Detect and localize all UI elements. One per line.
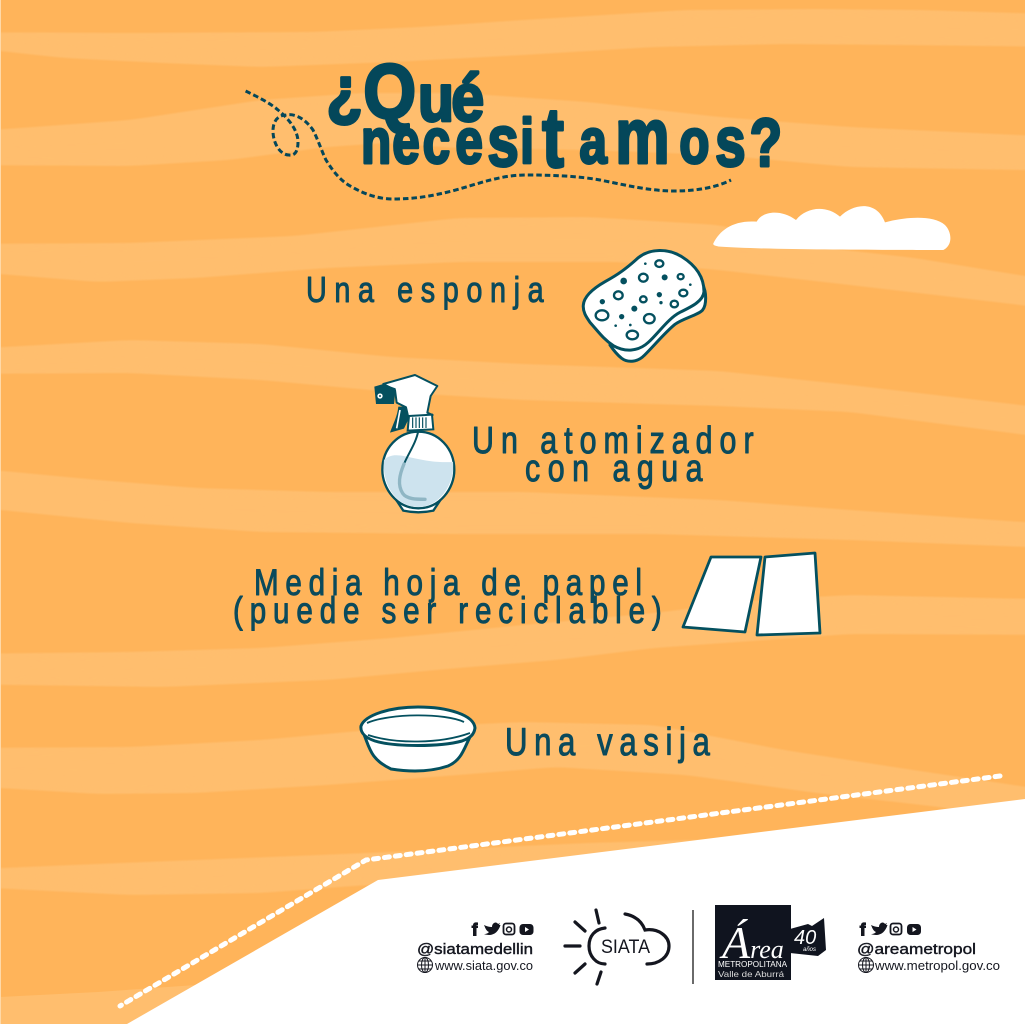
text: Una vasija: Una vasija: [505, 721, 710, 764]
text: Media hoja de papel: Media hoja de papel: [254, 563, 642, 604]
title: i: [520, 106, 534, 176]
title: e: [392, 106, 420, 176]
title: s: [487, 101, 519, 182]
social icons: [472, 922, 534, 936]
text: Media hoja de papel: [233, 563, 662, 632]
Área Metropolitana logo: Área: [719, 917, 784, 968]
text: Un atomizador con agua: con agua: [525, 448, 703, 490]
title: ¿: [326, 54, 362, 128]
social icons: [860, 922, 921, 936]
title: t: [542, 91, 564, 185]
icon: spray bottle: [374, 375, 454, 512]
cloud: [713, 206, 950, 250]
title: e: [456, 106, 483, 176]
title: o: [679, 106, 709, 176]
social block: Área: [857, 922, 1000, 973]
icon: sponge: [583, 251, 706, 361]
social block: SIATA: [417, 922, 534, 973]
title: [326, 49, 782, 185]
white footer panel: [127, 799, 1025, 1024]
icon: bowl: [361, 707, 475, 771]
SIATA logo: [565, 910, 669, 984]
dashed title flourish: [246, 91, 731, 199]
text: Media hoja de papel: (puede ser reciclable): [233, 591, 662, 632]
social block: Área: www.metropol.gov.co: [874, 959, 1000, 973]
icon: globe: [418, 958, 432, 972]
social block: SIATA: www.siata.gov.co: [434, 959, 533, 973]
title: é: [451, 62, 484, 136]
dashed white path: [120, 776, 1000, 1006]
Área Metropolitana logo: 40: [794, 927, 816, 949]
title: n: [361, 106, 391, 176]
title: m: [615, 93, 670, 180]
divider: [692, 910, 694, 984]
Área Metropolitana logo: [715, 905, 826, 980]
title: s: [715, 104, 746, 182]
text: Una esponja: Una esponja: [306, 269, 544, 310]
Área Metropolitana logo: METROPOLITANA: [718, 959, 787, 969]
title: u: [418, 62, 454, 136]
icon: paper sheets: [683, 553, 820, 635]
Área Metropolitana logo: Valle de Aburrá: [718, 969, 784, 979]
text: Un atomizador con agua: [472, 420, 754, 490]
social block: SIATA: @siatamedellin: [417, 941, 533, 958]
title: c: [423, 106, 450, 176]
title: ?: [750, 105, 782, 180]
SIATA logo: SIATA: [601, 936, 650, 958]
icon: globe: [858, 958, 874, 972]
title: a: [580, 106, 607, 176]
social block: Área: @areametropol: [857, 941, 976, 958]
title: Q: [363, 49, 416, 135]
text: Un atomizador con agua: Un atomizador: [472, 420, 754, 462]
Área Metropolitana logo: años: [803, 947, 816, 953]
